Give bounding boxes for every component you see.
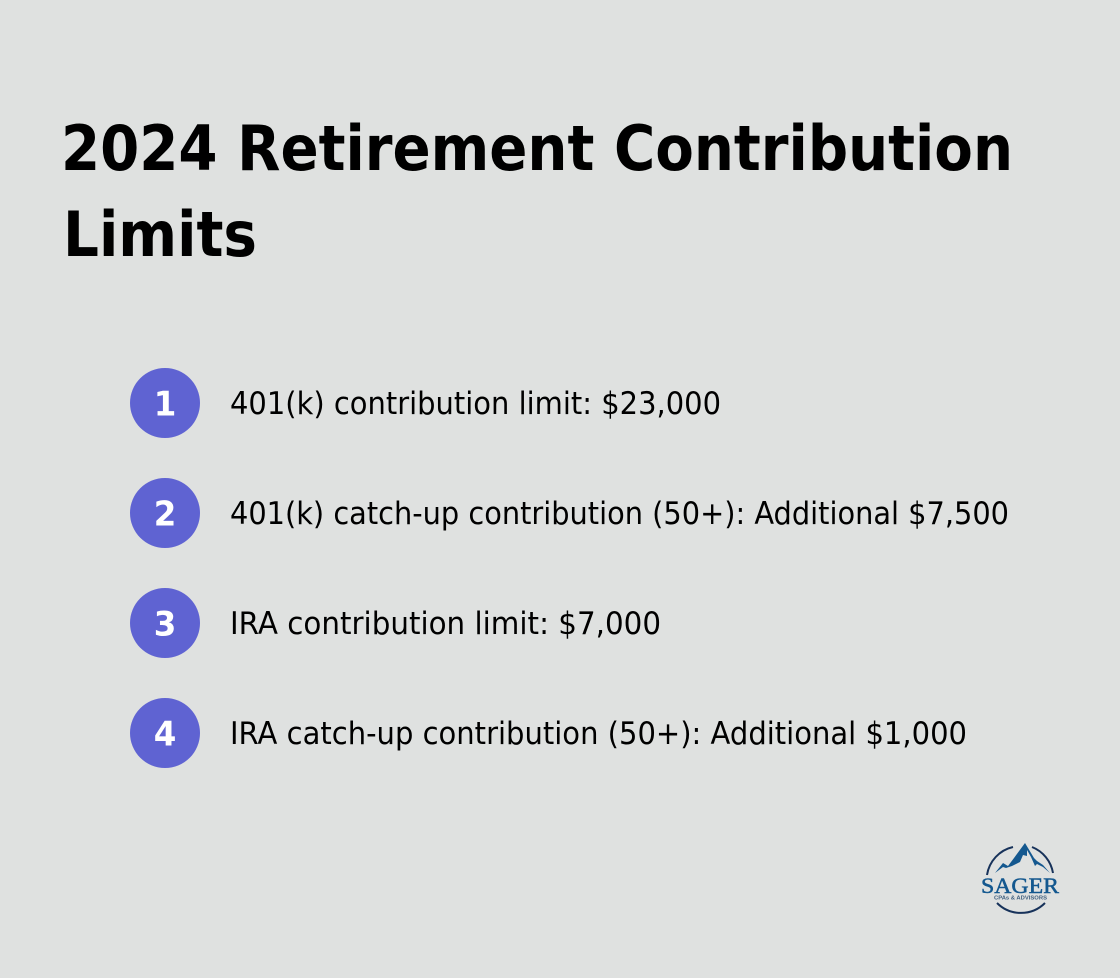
item 4: IRA catch-up: IRA catch-up contribution (50+): Additional $1,000	[230, 716, 967, 752]
title: Limits	[63, 198, 257, 271]
logo tagline: CPAs & ADVISORS	[994, 896, 1047, 902]
item 1: 401(k) limit: 1	[154, 384, 176, 424]
title	[61, 112, 1013, 271]
item 3: IRA limit: 3	[154, 604, 176, 644]
logo mountains	[995, 843, 1050, 873]
logo: Sager CPAs & Advisors	[981, 843, 1059, 913]
item 3: IRA limit: IRA contribution limit: $7,000	[230, 606, 661, 642]
item 3: IRA limit	[130, 588, 661, 658]
item 2: 401(k) catch-up: 2	[154, 494, 176, 534]
list of contribution limits	[130, 368, 1009, 768]
logo ring	[987, 847, 1053, 913]
logo wordmark: SAGER	[981, 873, 1059, 898]
title: 2024 Retirement Contribution	[61, 112, 1013, 185]
item 1: 401(k) limit: 401(k) contribution limit: $23,000	[230, 386, 721, 422]
item 2: 401(k) catch-up: 401(k) catch-up contribution (50+): Additional $7,500	[230, 496, 1009, 532]
item 4: IRA catch-up	[130, 698, 967, 768]
item 1: 401(k) limit	[130, 368, 721, 438]
item 4: IRA catch-up: 4	[154, 714, 176, 754]
item 2: 401(k) catch-up	[130, 478, 1009, 548]
